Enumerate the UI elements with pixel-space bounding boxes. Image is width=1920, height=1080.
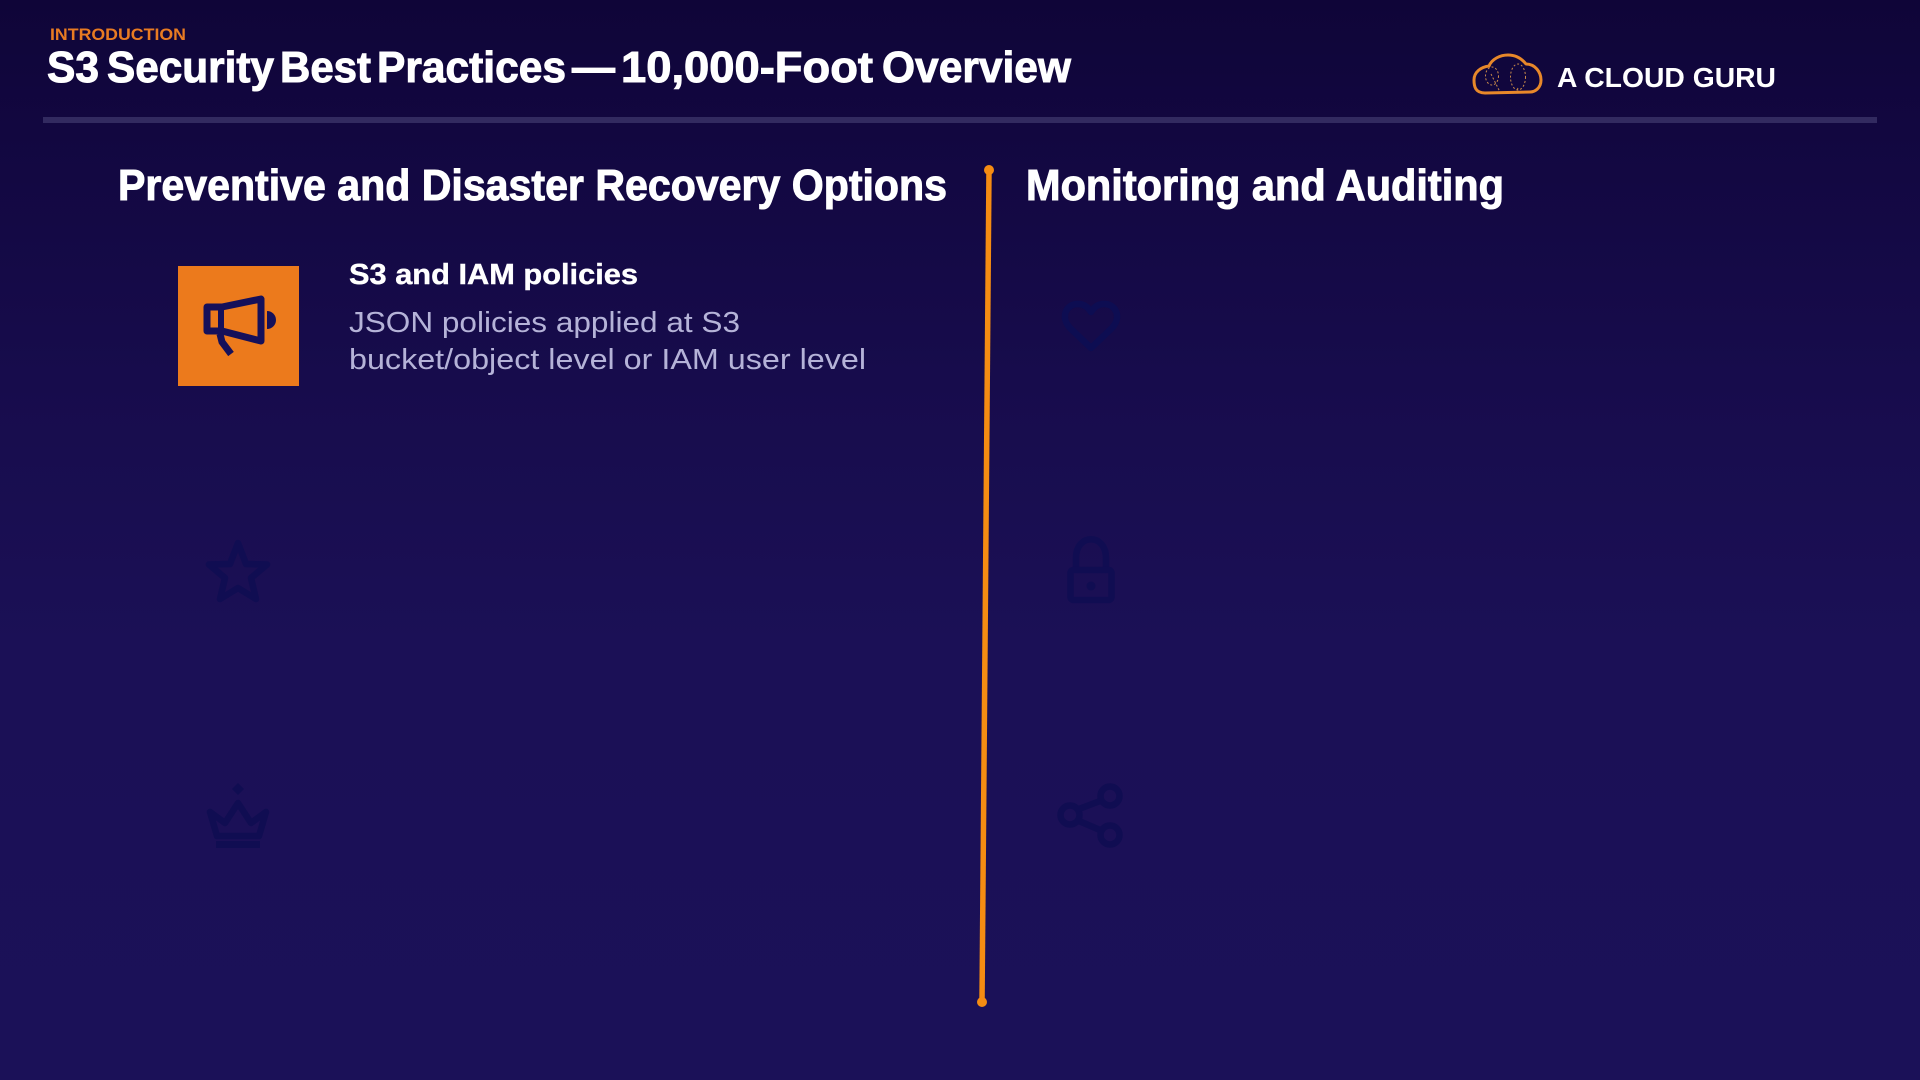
section label: INTRODUCTION: [50, 26, 186, 44]
heading: preventive and disaster recovery options: Preventive and Disaster Recovery Options: [118, 161, 947, 210]
icon: padlock: [1070, 539, 1112, 600]
center divider line: [977, 165, 994, 1007]
item description: [349, 307, 866, 376]
item heading: S3 and IAM policies: [349, 259, 638, 291]
title: S3: [47, 43, 99, 92]
icon: heart: [1065, 304, 1117, 348]
title: Overview: [882, 43, 1072, 92]
icon: share: [1060, 786, 1120, 844]
title: [47, 43, 1072, 92]
logo wordmark: A CLOUD GURU: [1557, 62, 1776, 93]
icon: megaphone on orange tile: [178, 266, 299, 386]
header divider: [43, 117, 1877, 123]
title: Practices: [377, 43, 566, 92]
icon: cloud logo: [1474, 55, 1541, 93]
logo: A Cloud Guru: [1474, 55, 1776, 93]
icon: star: [209, 543, 267, 599]
title: 10,000-Foot: [621, 43, 873, 92]
heading: monitoring and auditing: Monitoring and Auditing: [1026, 161, 1504, 210]
item: S3 and IAM policies: [178, 259, 866, 386]
item description: bucket/object level or IAM user level: [349, 344, 866, 376]
title: Best: [280, 43, 371, 92]
title: —: [572, 43, 615, 92]
item description: JSON policies applied at S3: [349, 307, 740, 339]
icon: crown: [210, 783, 266, 848]
title: Security: [107, 43, 275, 92]
